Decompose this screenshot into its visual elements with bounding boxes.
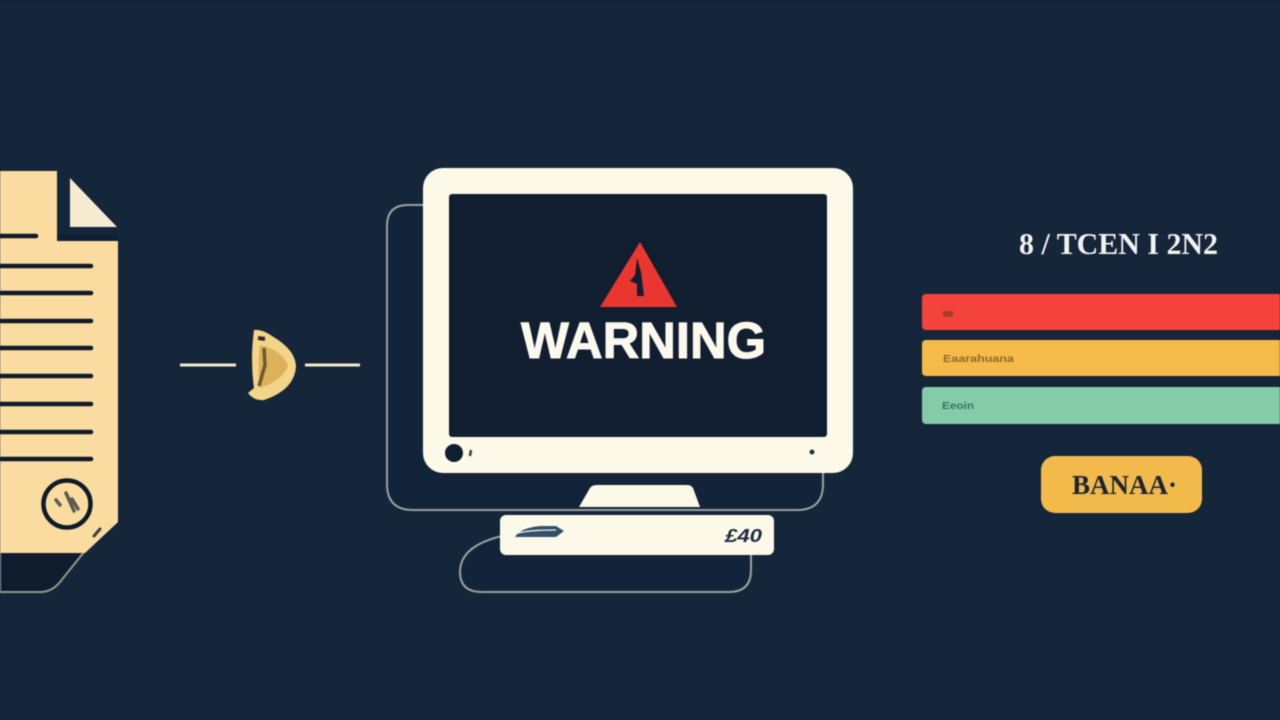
right indicator dot <box>810 450 814 454</box>
computer base unit <box>500 515 774 555</box>
power button <box>445 444 463 462</box>
left indicator dot <box>470 450 471 456</box>
action button <box>1041 456 1202 513</box>
document shadow outline <box>0 552 84 592</box>
red status bar <box>922 294 1280 330</box>
base slot <box>515 526 564 537</box>
amber status bar <box>922 340 1280 376</box>
monitor cable outline <box>387 205 823 510</box>
base cable outline <box>460 536 751 592</box>
monitor frame <box>423 168 853 473</box>
green status bar: Eeoin <box>942 401 974 412</box>
notch shadow <box>57 233 118 241</box>
status panel <box>922 226 1280 513</box>
document page <box>0 171 118 553</box>
base label: £40 <box>724 526 762 546</box>
right connector line <box>305 364 360 366</box>
icon: warning triangle <box>600 242 677 307</box>
monitor screen <box>449 194 827 437</box>
connector with coin icon <box>180 330 360 400</box>
left connector line <box>180 364 236 366</box>
amber status bar: Eaarahuana <box>943 354 1015 365</box>
green status bar <box>922 387 1280 424</box>
action button: BANAA· <box>1072 470 1177 500</box>
folded corner <box>70 178 117 227</box>
warning label: WARNING <box>521 312 766 369</box>
status heading: 8 / TCEN I 2N2 <box>1019 226 1218 261</box>
warning panel <box>521 242 766 369</box>
text lines <box>0 236 91 459</box>
monitor stand <box>579 485 700 507</box>
document illustration <box>0 171 118 592</box>
corner mark <box>94 529 100 536</box>
computer illustration <box>387 168 853 592</box>
document seal icon <box>44 480 90 528</box>
icon: half coin <box>248 330 296 400</box>
